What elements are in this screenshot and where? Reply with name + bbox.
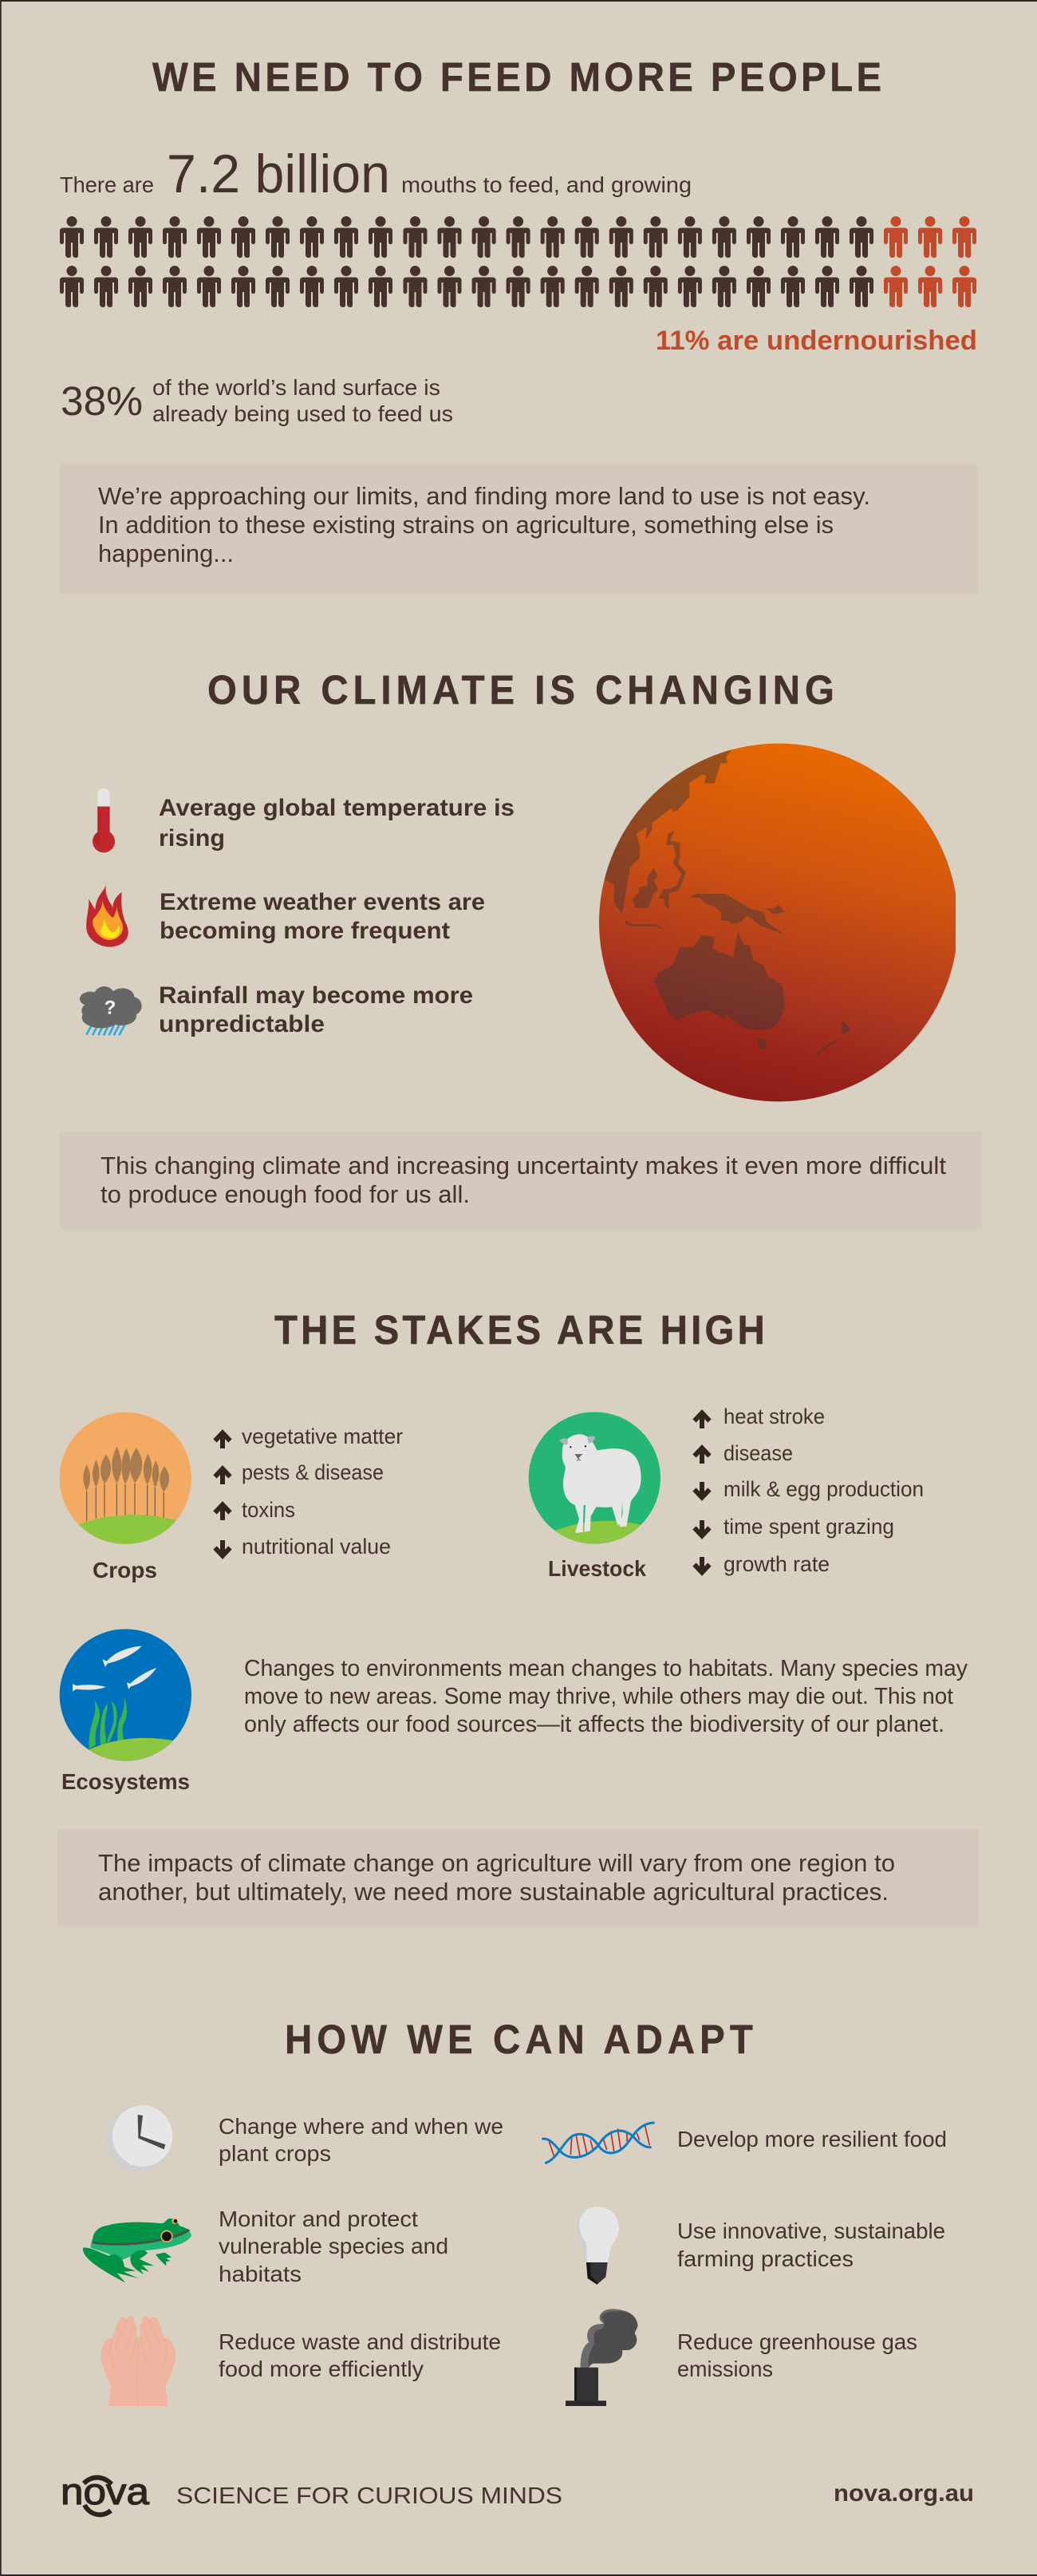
- text: change where and when: Change where and when we: [219, 2114, 503, 2139]
- stat: 38% of land surface: of the world’s land surface is: [152, 375, 440, 400]
- text box: regional impacts: another, but ultimately, we need more sustainable agricultural practices.: [98, 1878, 889, 1906]
- icon: dna helix: [542, 2123, 655, 2163]
- text: temperature rising: rising: [159, 825, 225, 851]
- text: monitor and protect: [219, 2207, 448, 2286]
- icon: light bulb: [577, 2207, 619, 2285]
- stat: 7.2 billion mouths to feed: mouths to feed, and growing: [401, 172, 692, 197]
- text: monitor and protect: Monitor and protect: [219, 2207, 418, 2231]
- text: change where and when: [219, 2114, 503, 2166]
- icon: cupped hands: [101, 2316, 175, 2406]
- list: livestock effects: heat stroke: [724, 1405, 825, 1428]
- text: habitats paragraph: move to new areas. Some may thrive, while others may die out. This not: [244, 1684, 953, 1709]
- label: crops: Crops: [93, 1558, 157, 1582]
- text box: regional impacts: The impacts of climate change on agriculture will vary from one region to: [98, 1849, 895, 1877]
- text: reduce waste: food more efficiently: [219, 2357, 424, 2381]
- list: crop effects: nutritional value: [242, 1535, 391, 1559]
- heading: we need to feed more people: WE NEED TO FEED MORE PEOPLE: [152, 54, 881, 100]
- text box: changing climate: [60, 1132, 982, 1230]
- text: resilient food: Develop more resilient food: [677, 2127, 947, 2151]
- icon: smokestack: [566, 2309, 637, 2406]
- icon: clock: [106, 2105, 172, 2172]
- icon: frog: [83, 2218, 191, 2283]
- text: monitor and protect: habitats: [219, 2262, 302, 2286]
- heading: our climate is changing: OUR CLIMATE IS CHANGING: [207, 667, 834, 713]
- tagline: SCIENCE FOR CURIOUS MINDS: [176, 2483, 562, 2509]
- heading: the stakes are high: THE STAKES ARE HIGH: [274, 1307, 765, 1353]
- icon: rain cloud: [80, 986, 142, 1035]
- label: ecosystems: Ecosystems: [61, 1769, 190, 1794]
- stat: 38% of land surface: already being used to feed us: [152, 401, 453, 426]
- stat: 7.2 billion mouths to feed: [60, 144, 692, 204]
- footer: [61, 2471, 974, 2515]
- pictogram: rows of people: [60, 216, 976, 307]
- list: livestock effects: growth rate: [724, 1552, 830, 1576]
- text box: approaching our limits: In addition to these existing strains on agriculture, something else is: [98, 511, 834, 539]
- list: crop effects: [215, 1424, 403, 1559]
- icon: rain cloud: ?: [104, 998, 116, 1019]
- icon: flame: [86, 882, 128, 947]
- text: reduce greenhouse gas: emissions: [677, 2357, 773, 2381]
- text box: changing climate: This changing climate and increasing uncertainty makes it even more difficult: [101, 1152, 946, 1179]
- text: reduce waste: [219, 2329, 501, 2381]
- icon: overheating globe: [590, 734, 965, 1109]
- people well nourished: [60, 216, 873, 307]
- text: innovative farming: Use innovative, sustainable: [677, 2218, 945, 2243]
- url: nova.org.au: [834, 2480, 974, 2507]
- text: extreme weather: becoming more frequent: [160, 918, 450, 944]
- list: livestock effects: milk & egg production: [724, 1477, 924, 1501]
- text: monitor and protect: vulnerable species and: [219, 2234, 448, 2258]
- text: rainfall: [159, 982, 473, 1037]
- stat: 7.2 billion mouths to feed: There are: [60, 172, 154, 197]
- text: extreme weather: [160, 889, 485, 944]
- list: livestock effects: time spent grazing: [724, 1515, 894, 1539]
- text: reduce waste: Reduce waste and distribute: [219, 2329, 501, 2354]
- text box: approaching our limits: [60, 464, 978, 595]
- list: livestock effects: [694, 1405, 924, 1576]
- text box: approaching our limits: happening...: [98, 539, 234, 567]
- icon: crops: [60, 1412, 191, 1548]
- text: habitats paragraph: only affects our food sources—it affects the biodiversity of our planet.: [244, 1712, 944, 1737]
- people undernourished: [884, 216, 976, 307]
- text: rainfall: Rainfall may become more: [159, 982, 473, 1009]
- panel: we need to feed more people: [60, 54, 978, 595]
- text: reduce greenhouse gas: [677, 2329, 917, 2381]
- label: livestock: Livestock: [548, 1556, 646, 1581]
- list: crop effects: toxins: [242, 1498, 295, 1522]
- icon: thermometer: [93, 788, 115, 852]
- text: rainfall: unpredictable: [159, 1011, 325, 1037]
- icon: sheep: [529, 1412, 660, 1548]
- text: extreme weather: Extreme weather events are: [160, 889, 485, 915]
- text: change where and when: plant crops: [219, 2141, 331, 2166]
- callout: 11% are undernourished: 11% are undernourished: [656, 326, 977, 356]
- icon: ecosystem: [60, 1629, 191, 1765]
- list: crop effects: vegetative matter: [242, 1424, 403, 1448]
- text: innovative farming: [677, 2218, 945, 2271]
- text box: changing climate: to produce enough food for us all.: [101, 1180, 470, 1208]
- list: crop effects: pests & disease: [242, 1460, 384, 1484]
- panel: the stakes are high: [57, 1307, 979, 1927]
- text: temperature rising: Average global temperature is: [159, 795, 515, 821]
- logo: nova: nova: [61, 2471, 149, 2512]
- text: temperature rising: [159, 795, 515, 851]
- list: livestock effects: disease: [724, 1441, 793, 1465]
- panel: how we can adapt: [83, 2017, 947, 2406]
- text: habitats paragraph: [244, 1656, 968, 1737]
- panel: our climate is changing: [80, 675, 956, 1208]
- text: innovative farming: farming practices: [677, 2246, 854, 2271]
- text: habitats paragraph: Changes to environments mean changes to habitats. Many species may: [244, 1656, 968, 1681]
- stat: 38% of land surface: [61, 375, 453, 426]
- text box: regional impacts: [57, 1829, 979, 1927]
- heading: how we can adapt: HOW WE CAN ADAPT: [285, 2017, 753, 2062]
- text box: approaching our limits: We’re approaching our limits, and finding more land to use is not easy.: [98, 482, 870, 510]
- stat: 38% of land surface: 38%: [61, 378, 143, 424]
- text: reduce greenhouse gas: Reduce greenhouse gas: [677, 2329, 917, 2354]
- stat: 7.2 billion mouths to feed: 7.2 billion: [167, 144, 390, 204]
